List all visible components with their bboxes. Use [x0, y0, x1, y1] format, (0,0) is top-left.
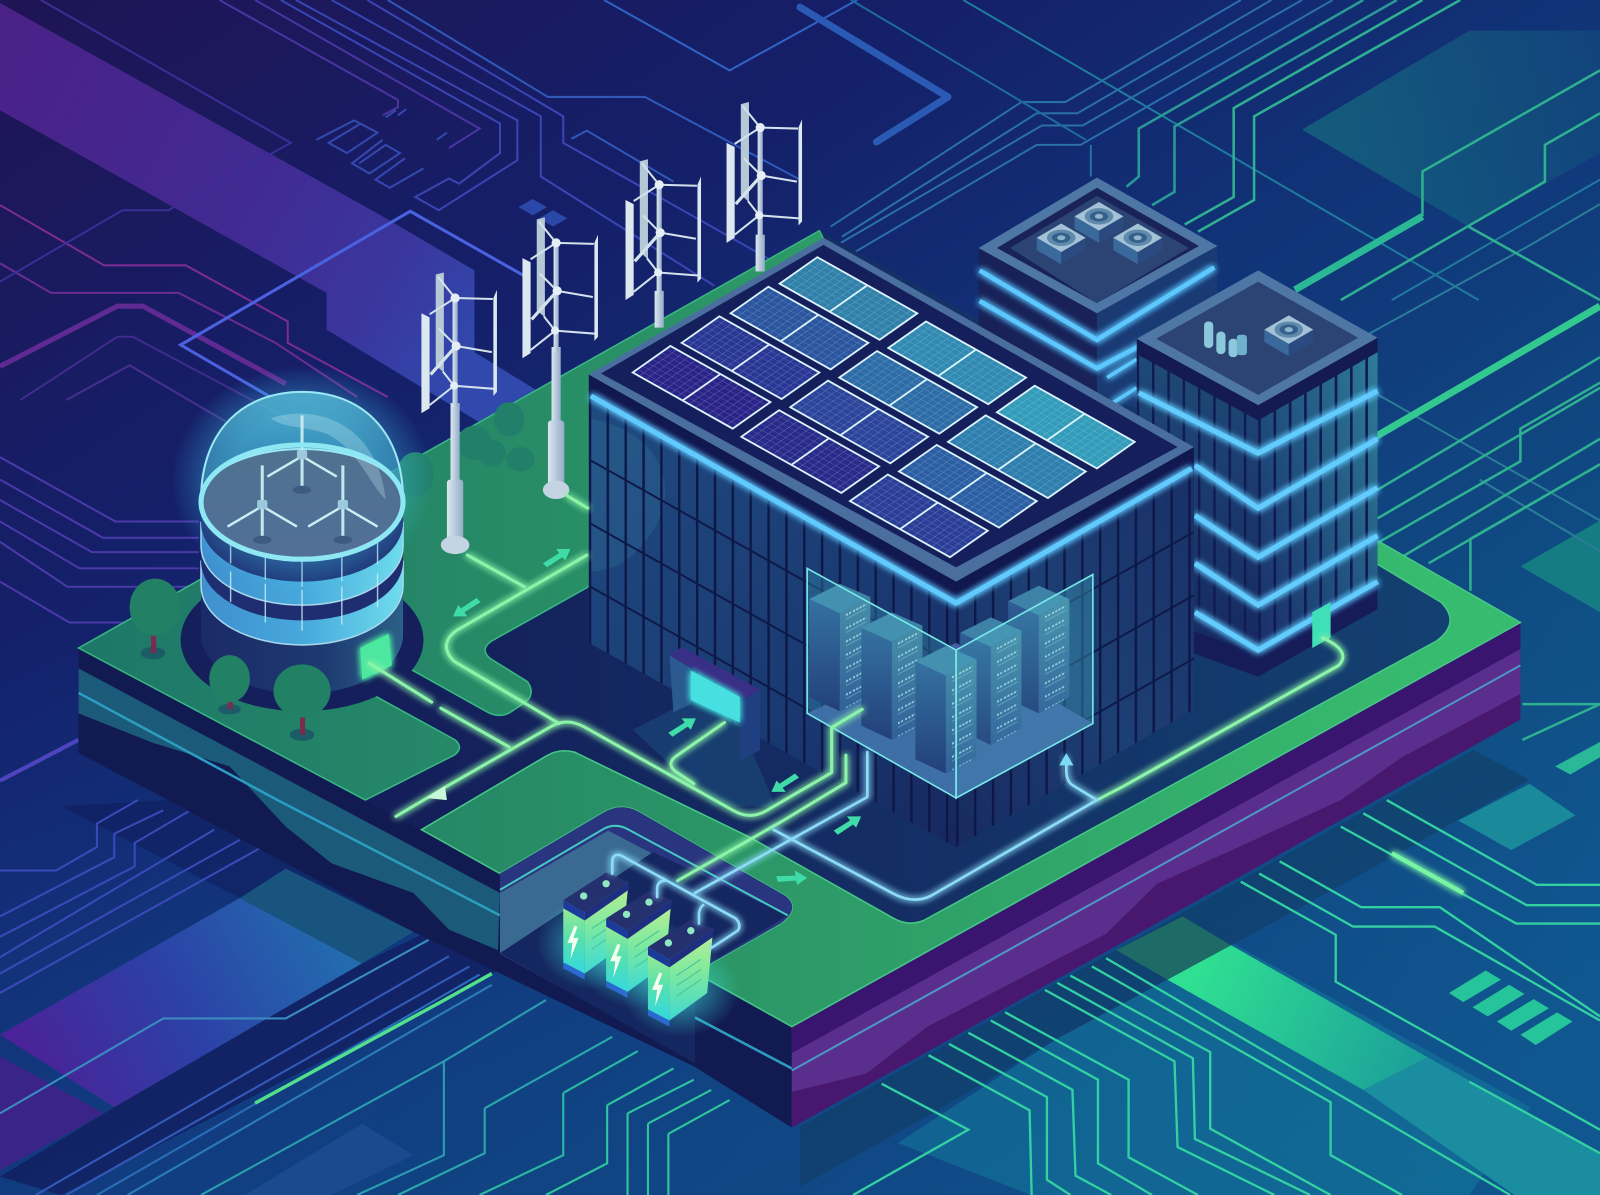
- glass mullions: [231, 531, 378, 631]
- dome tower: [171, 365, 433, 711]
- strata line: [79, 693, 500, 915]
- pit wall: [500, 807, 792, 1061]
- roof edge: [997, 188, 1199, 303]
- room back fill: [807, 568, 1093, 798]
- dock wall top: [669, 647, 760, 699]
- right wall: [956, 467, 1194, 847]
- dome feed: [369, 663, 509, 747]
- glass reflection: [589, 418, 665, 571]
- tower 2 feed: [567, 496, 588, 508]
- platform: sides: [79, 623, 1520, 1128]
- dome turbine back: [267, 415, 337, 494]
- wind tower group: [397, 102, 802, 554]
- battery 3: [621, 919, 740, 1037]
- background panel: bright green band lower-right: [1167, 945, 1428, 1090]
- base: [1137, 584, 1378, 677]
- roof: [1156, 282, 1358, 395]
- dock light cone: [633, 700, 776, 806]
- power flow lines: blue: [612, 752, 1097, 948]
- battery wiring: [699, 905, 703, 924]
- battery pit: [500, 807, 792, 1063]
- tree 3: [273, 664, 331, 741]
- background panel: teal rhombus top-right: [1302, 31, 1600, 227]
- background panel: teal extension lower-left: [240, 868, 413, 963]
- left side face: [79, 648, 792, 1128]
- lawn main path: [446, 555, 587, 724]
- lower glass ring: [201, 561, 403, 645]
- dome halo: [171, 365, 433, 594]
- rim: [979, 178, 1217, 313]
- light band lower: [980, 301, 1153, 368]
- solar module: [850, 475, 988, 557]
- inner teal line: [500, 826, 788, 915]
- background panel: blue block bottom: [245, 1124, 413, 1195]
- arrow: [668, 718, 696, 737]
- tree 1: [130, 579, 181, 659]
- solar module: [839, 351, 977, 434]
- tower 4: [727, 102, 802, 271]
- battery wiring: [657, 881, 665, 897]
- dock frame right: [740, 690, 760, 760]
- right window grid: [956, 467, 1194, 847]
- trees around dome: [130, 579, 331, 741]
- rooftop unit: [1113, 223, 1162, 264]
- back office tower: [979, 178, 1217, 408]
- rooftop unit: [1264, 315, 1313, 356]
- front office tower: [1137, 270, 1378, 677]
- battery 1: [537, 873, 655, 990]
- background panel: purple and blue diagonal band top-left: [0, 3, 541, 429]
- main ring path: [396, 709, 862, 816]
- arrow: [771, 774, 799, 792]
- battery wiring: [612, 855, 739, 948]
- glowing roof line: [591, 396, 1192, 603]
- rim ring: [201, 445, 403, 559]
- batteries: [537, 873, 740, 1037]
- solar array: [633, 257, 1135, 557]
- dome turbine left: [228, 465, 297, 544]
- background panel: teal band lower-right: [1363, 1057, 1600, 1195]
- circuit traces: blue lines upper-left of lower-left field: [0, 800, 260, 993]
- upward arrow: [1059, 753, 1073, 765]
- solar module: [899, 445, 1037, 528]
- left slats: [1137, 352, 1258, 653]
- thick blue bracket trace: [800, 7, 948, 142]
- background panel: violet corner lower-left: [0, 1056, 104, 1171]
- circuit traces: green top-right: [1127, 0, 1600, 740]
- circuit traces: diagonal lines lower-left: [0, 940, 730, 1195]
- circuit traces: green lower-right: [853, 800, 1600, 1195]
- tower 1: [421, 272, 497, 554]
- solar module: [780, 257, 917, 340]
- left glass wall: [807, 568, 956, 798]
- battery green feed: [678, 755, 846, 881]
- dock door glow: [691, 670, 740, 723]
- dome turbine right: [308, 465, 378, 544]
- tower 2: [522, 217, 598, 499]
- parapet: [589, 375, 1194, 604]
- server rack 2: [861, 612, 922, 740]
- arrow: [543, 549, 570, 567]
- tree behind dome: [397, 452, 434, 497]
- platform: green lawn upper-left: [79, 231, 857, 800]
- background panel: teal field lower-right: [898, 944, 1531, 1195]
- circuit traces: blue-teal top-right: [831, 0, 1600, 551]
- background shadow: platform shadow lower-right: [800, 750, 1530, 1187]
- tree 2: [209, 655, 250, 714]
- right slats: [1258, 352, 1378, 653]
- right glass wall: [956, 575, 1093, 798]
- platform: green lawn front and right border: [421, 538, 1520, 1027]
- extra light bands: [1107, 359, 1137, 403]
- circuit trace: bright blue outline: [181, 211, 526, 397]
- solar module: [731, 287, 868, 369]
- dome highlight: [270, 414, 386, 500]
- server rack 1: [809, 584, 870, 711]
- right wall: [1097, 246, 1217, 408]
- rooftop unit: [1074, 202, 1123, 243]
- dock frame left: [669, 655, 691, 712]
- entry door: [1312, 602, 1331, 648]
- glowing green trace lower-left: [255, 974, 492, 1103]
- dark ring lower: [201, 546, 403, 620]
- left wall: [979, 248, 1097, 393]
- solar module: [997, 386, 1135, 468]
- solar module: [948, 415, 1086, 498]
- hatch marks: lower-right: [1449, 970, 1572, 1045]
- right wall: [1258, 352, 1378, 677]
- glowing green trace lower-right: [1392, 853, 1463, 893]
- right side purple layers: [792, 623, 1520, 1128]
- background panel: teal rhombus right: [1520, 520, 1600, 612]
- right strata line: [792, 665, 1520, 1070]
- glass dome: [201, 392, 403, 500]
- glass server room: [807, 568, 1093, 798]
- arrow: [774, 864, 807, 894]
- door: [360, 634, 392, 680]
- solar module: [633, 346, 770, 429]
- room floor: [807, 643, 1093, 798]
- tower 1 feed: [467, 555, 524, 587]
- light band upper: [980, 267, 1214, 340]
- arrowhead on ring path: [427, 786, 447, 800]
- background panel: green strip right edge: [1555, 742, 1600, 775]
- main data center building: [589, 238, 1194, 847]
- arrow: [453, 598, 481, 616]
- upper glass ring: [201, 522, 403, 605]
- loading dock: [633, 647, 776, 806]
- dark ring upper: [201, 500, 403, 582]
- top dark purple band: [792, 623, 1520, 1053]
- flow arrows: [427, 549, 1073, 894]
- dome floor: [201, 445, 403, 559]
- tree cluster upper: [457, 402, 535, 471]
- teal strata: [79, 668, 500, 950]
- rim: [1137, 270, 1378, 405]
- solar module: [682, 316, 819, 399]
- pit floor: [500, 852, 788, 1063]
- circuit traces: purple left: [0, 0, 388, 781]
- battery 2: [580, 891, 698, 1008]
- background panel: blue block lower-left: [0, 898, 362, 1107]
- background panel: shaded green under platform: [1116, 916, 1231, 980]
- tower 3: [626, 159, 701, 328]
- glowing floor bands: [1139, 391, 1378, 650]
- dome pad: [181, 568, 423, 711]
- background shadow: dark diagonal lower-left: [0, 929, 500, 1195]
- right building feed: [1097, 638, 1343, 800]
- server rack 4: [960, 617, 1021, 745]
- front strata line: [695, 1017, 792, 1068]
- pit slate face: [500, 831, 663, 953]
- solar module: [790, 381, 928, 463]
- platform: top dark roads: [79, 231, 1520, 1027]
- left wall: [1137, 352, 1258, 677]
- left window grid: [589, 395, 956, 847]
- solar module: [741, 410, 879, 493]
- roof rim: [589, 238, 1194, 582]
- background shadow: dark diagonal left: [61, 800, 413, 932]
- background panel: teal diamond lower-right: [1458, 784, 1576, 850]
- rooftop unit: [1037, 223, 1086, 264]
- server rack 5: [1008, 586, 1069, 713]
- server rack 3: [915, 646, 977, 774]
- parapet: [1137, 338, 1378, 420]
- solar module: [888, 321, 1026, 404]
- rooftop pipes: [1204, 321, 1247, 357]
- battery blue feed: [695, 752, 867, 893]
- small diamonds near grille: [518, 199, 567, 227]
- roof deck: [601, 245, 1178, 567]
- base cylinder: [201, 586, 403, 694]
- left wall: [589, 395, 956, 847]
- power flow lines: green: [369, 496, 1343, 881]
- circuit traces: parallel blue top-centre: [219, 0, 857, 286]
- chip grille: top-left: [316, 109, 447, 188]
- perimeter blue line: [773, 757, 1097, 900]
- lower dark wave: [792, 694, 1520, 1128]
- roof: [1010, 196, 1189, 303]
- arrow: [834, 816, 861, 835]
- dock feed: [671, 723, 724, 784]
